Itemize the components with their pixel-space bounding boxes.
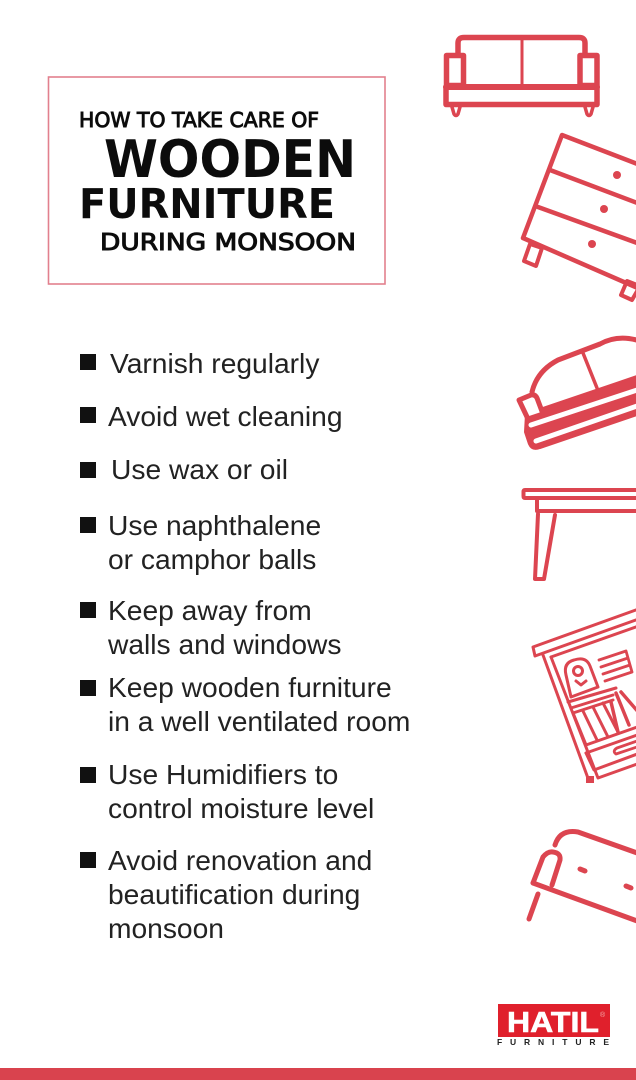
title line: furniture: FURNITURE [79, 180, 335, 228]
icon: table [524, 490, 636, 579]
tip: naphthalene: or camphor balls [108, 543, 316, 575]
icon: two-seat sofa [446, 37, 597, 116]
icon: angled sofa [519, 338, 636, 449]
logo registered mark: ® [600, 1011, 606, 1019]
tip: walls and windows: Keep away from [108, 594, 312, 626]
icon: partial sofa [529, 832, 636, 922]
tip: ventilated room: Keep wooden furniture [108, 671, 392, 703]
tip: naphthalene [80, 509, 321, 575]
tip: ventilated room [80, 671, 410, 737]
tip: wax or oil: Use wax or oil [111, 453, 288, 485]
tip: renovation: monsoon [108, 912, 224, 944]
title panel [48, 77, 385, 284]
tip: humidifiers [80, 758, 374, 824]
tips list [80, 347, 410, 944]
title frame [48, 77, 385, 284]
tip: renovation: beautification during [108, 878, 360, 910]
tip: renovation: Avoid renovation and [108, 844, 372, 876]
icon: chest of drawers [523, 135, 636, 300]
tip: varnish: Varnish regularly [110, 347, 320, 379]
tip: walls and windows [80, 594, 341, 660]
tip: ventilated room: in a well ventilated room [108, 705, 410, 737]
icon: bookshelf [533, 608, 636, 783]
tip: naphthalene: Use naphthalene [108, 509, 321, 541]
logo wordmark: HATIL [507, 1007, 599, 1039]
tip: wet cleaning: Avoid wet cleaning [108, 400, 343, 432]
logo red badge [498, 1004, 610, 1037]
bookshelf foot [586, 776, 594, 783]
tip: walls and windows: walls and windows [107, 628, 341, 660]
title line: how to take care of: HOW TO TAKE CARE OF [79, 108, 319, 132]
tip: renovation [80, 844, 372, 944]
title line: during monsoon: DURING MONSOON [100, 230, 356, 256]
bottom red band [0, 1068, 636, 1080]
tip: humidifiers: control moisture level [108, 792, 374, 824]
tip: humidifiers: Use Humidifiers to [108, 758, 338, 790]
title line: wooden: WOODEN [104, 130, 356, 190]
logo furniture caption: FURNITURE [497, 1037, 609, 1047]
logo: Hatil Furniture [497, 1004, 610, 1047]
